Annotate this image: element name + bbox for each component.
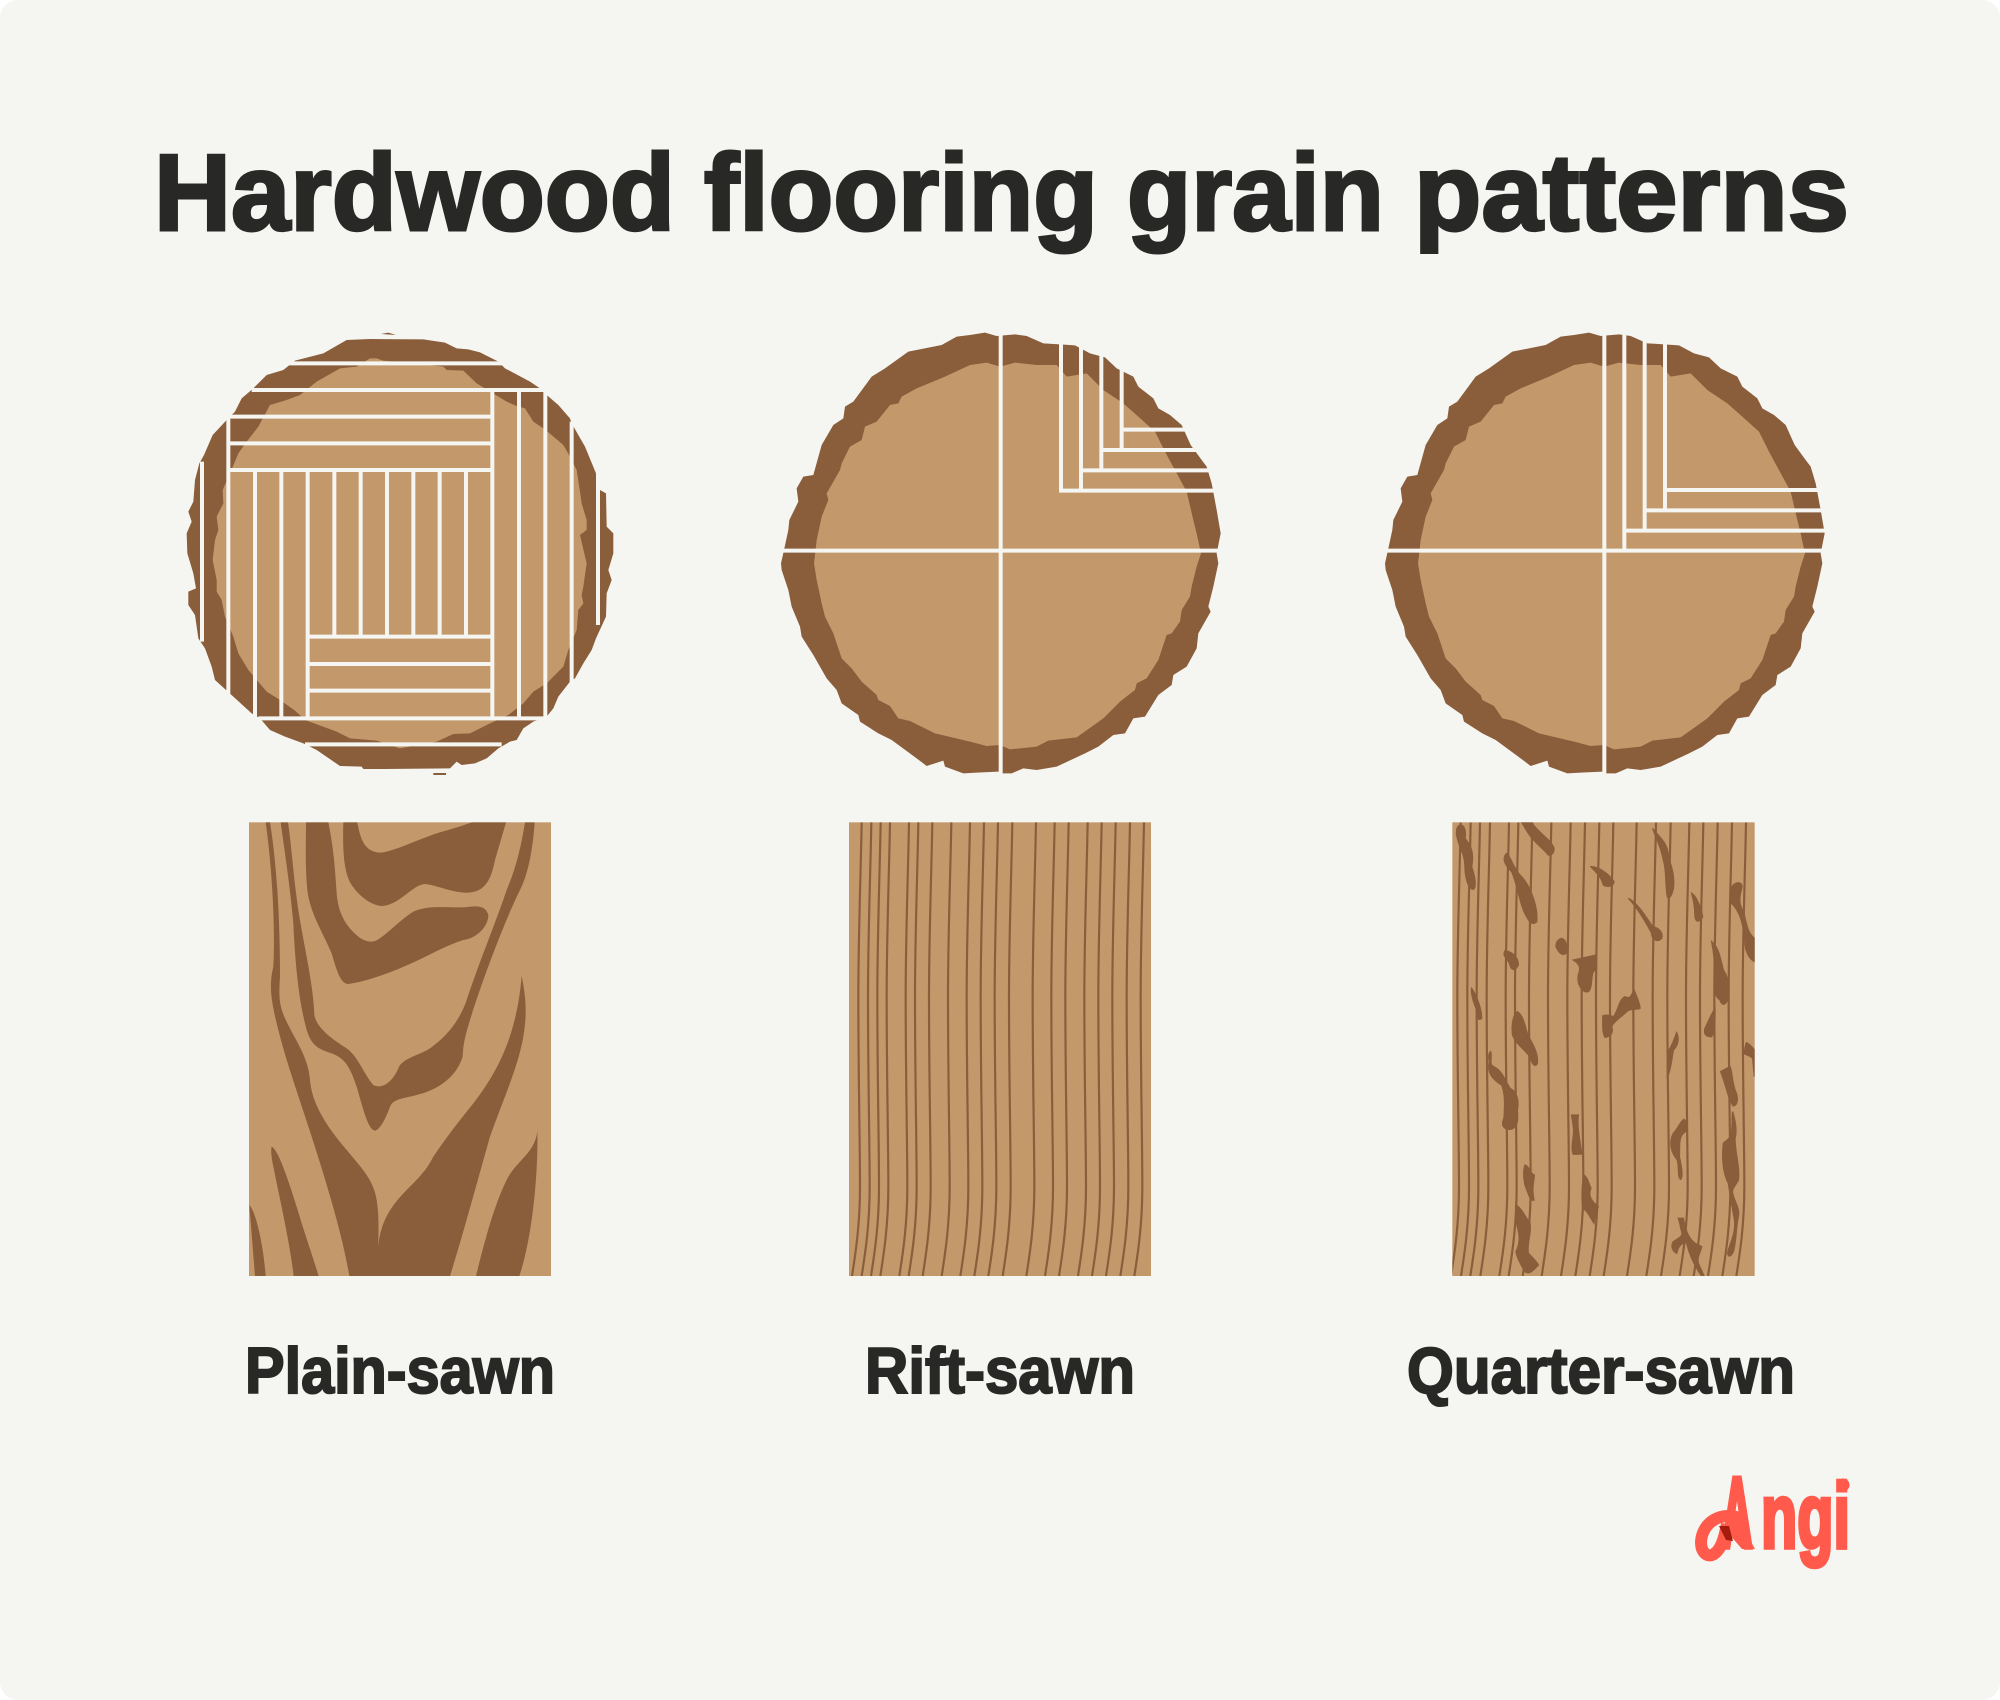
log cross-section: plain-sawn	[187, 333, 613, 775]
label: quarter-sawn: Quarter-sawn	[1407, 1334, 1795, 1407]
plank: quarter-sawn grain	[1451, 822, 1755, 1276]
panel: quarter-sawn	[1382, 330, 1827, 1407]
log cross-section: rift-sawn	[778, 330, 1223, 777]
title: grain	[1127, 132, 1384, 254]
logo: Angi: ngi	[1761, 1466, 1850, 1568]
plank: plain-sawn grain	[249, 822, 551, 1276]
plank: rift-sawn grain	[849, 822, 1151, 1276]
panel: plain-sawn	[187, 333, 613, 1407]
label: plain-sawn: Plain-sawn	[245, 1334, 555, 1407]
title	[154, 132, 1849, 254]
title: flooring	[704, 132, 1098, 254]
logo: Angi: A	[1722, 1458, 1752, 1567]
panel: rift-sawn	[778, 330, 1223, 1407]
logo: Angi	[1701, 1458, 1850, 1568]
log cross-section: quarter-sawn	[1382, 330, 1827, 777]
title: Hardwood	[154, 132, 675, 254]
title: patterns	[1414, 132, 1849, 254]
label: rift-sawn: Rift-sawn	[865, 1334, 1135, 1407]
